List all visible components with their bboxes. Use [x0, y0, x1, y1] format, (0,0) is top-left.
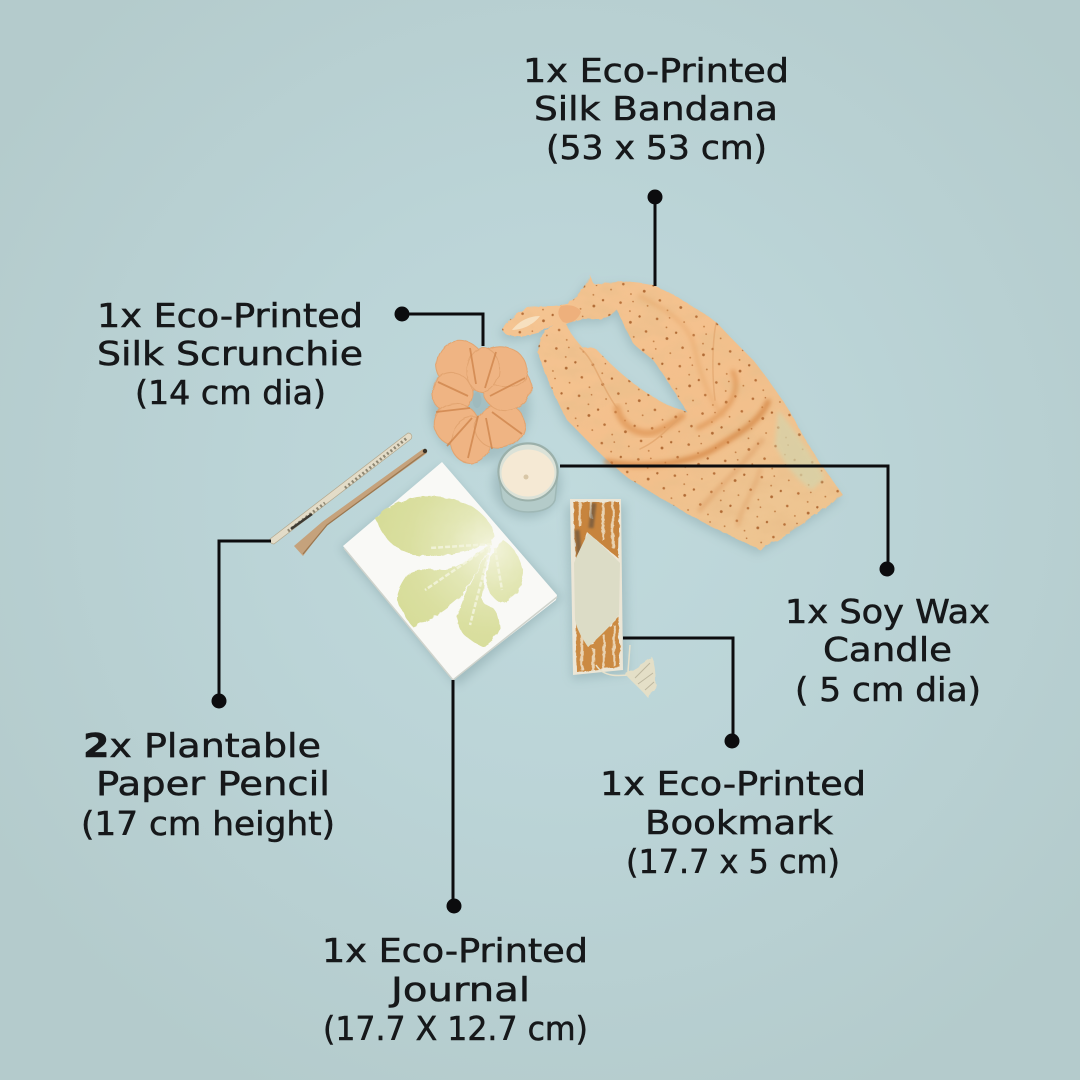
icon: silk bandana [500, 275, 843, 554]
callout: bookmark: 1x Eco-Printed [600, 764, 866, 803]
pencil one: printed paper [270, 433, 412, 544]
callout: paper pencil: Paper Pencil [96, 764, 330, 803]
bandana fold shading [580, 296, 768, 525]
callout: bookmark: Bookmark [645, 803, 834, 842]
journal leaf print [375, 496, 523, 647]
candle wick [524, 474, 528, 480]
callout: silk bandana: (53 x 53 cm) [546, 128, 767, 167]
bookmark tassel [596, 645, 656, 697]
callout: journal: Journal [389, 970, 530, 1009]
callout: silk scrunchie [97, 296, 483, 412]
callout: soy wax candle: 1x Soy Wax [785, 592, 990, 631]
callout: silk scrunchie: (14 cm dia) [135, 373, 326, 412]
bookmark bark texture [580, 502, 614, 670]
callout: bookmark [600, 638, 866, 881]
icon: soy wax candle [493, 443, 561, 518]
journal leaf veins [425, 544, 502, 625]
pencil two: kraft wooden [294, 449, 427, 556]
callout: bookmark: (17.7 x 5 cm) [626, 842, 840, 881]
callout: silk bandana: 1x Eco-Printed [523, 51, 789, 90]
callout: silk scrunchie: Silk Scrunchie [97, 334, 363, 373]
callout: soy wax candle: ( 5 cm dia) [795, 670, 981, 709]
scrunchie creases [436, 348, 525, 458]
icon: eco-printed journal [340, 462, 562, 686]
callout: paper pencil [81, 541, 335, 843]
callout: soy wax candle: Candle [823, 630, 952, 669]
scrunchie hole [472, 392, 482, 408]
callout: paper pencil: 2x Plantable [83, 726, 321, 765]
callout: journal: (17.7 X 12.7 cm) [323, 1009, 588, 1048]
callout: silk bandana: Silk Bandana [534, 89, 778, 128]
callout: silk scrunchie: 1x Eco-Printed [97, 296, 363, 335]
icon: paper pencils [270, 433, 427, 556]
bookmark cream leaf [574, 533, 620, 647]
icon: silk scrunchie [426, 332, 539, 466]
callout: paper pencil: (17 cm height) [81, 804, 335, 843]
bandana pale green edge [775, 410, 825, 490]
callout: silk bandana [523, 51, 789, 286]
bandana tail highlight [512, 316, 540, 330]
bandana knot [558, 305, 581, 323]
icon: eco-printed bookmark [566, 499, 656, 697]
callout: journal: 1x Eco-Printed [322, 931, 588, 970]
callout: journal [322, 680, 588, 1048]
callout: soy wax candle [560, 466, 990, 709]
